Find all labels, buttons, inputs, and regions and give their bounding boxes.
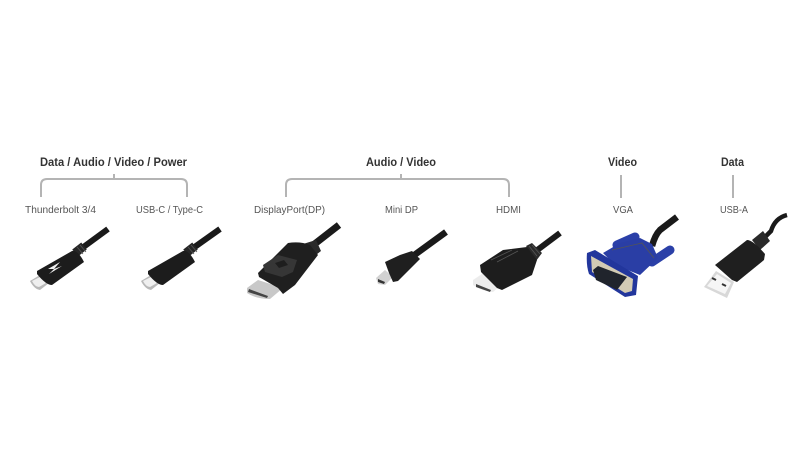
label: USB-C / Type-C: USB-C / Type-C (136, 204, 203, 216)
bracket: Data / Audio / Video / Power (41, 174, 187, 197)
label: HDMI: HDMI (496, 204, 521, 216)
icon: HDMI connector (473, 233, 560, 292)
icon: USB-C connector (141, 229, 220, 290)
label: USB-A: USB-A (720, 204, 748, 216)
heading: Data / Audio / Video / Power: Data / Audio / Video / Power (40, 155, 187, 169)
heading: Video: Video (608, 155, 637, 169)
icon: DisplayPort connector (247, 225, 339, 299)
label: Thunderbolt 3/4: Thunderbolt 3/4 (25, 204, 96, 216)
label: VGA: VGA (613, 204, 633, 216)
line: Video to VGA (620, 175, 622, 198)
line: Data to USB-A (732, 175, 734, 198)
heading: Data: Data (721, 155, 744, 169)
heading: Audio / Video: Audio / Video (366, 155, 436, 169)
icon: Mini DP connector (376, 232, 446, 285)
bracket: Audio / Video (286, 174, 509, 197)
label: Mini DP: Mini DP (385, 204, 418, 216)
icon: USB-A connector (704, 215, 787, 298)
label: DisplayPort(DP): DisplayPort(DP) (254, 204, 325, 216)
icon: Thunderbolt connector (30, 229, 108, 290)
icon: VGA connector (587, 217, 677, 297)
